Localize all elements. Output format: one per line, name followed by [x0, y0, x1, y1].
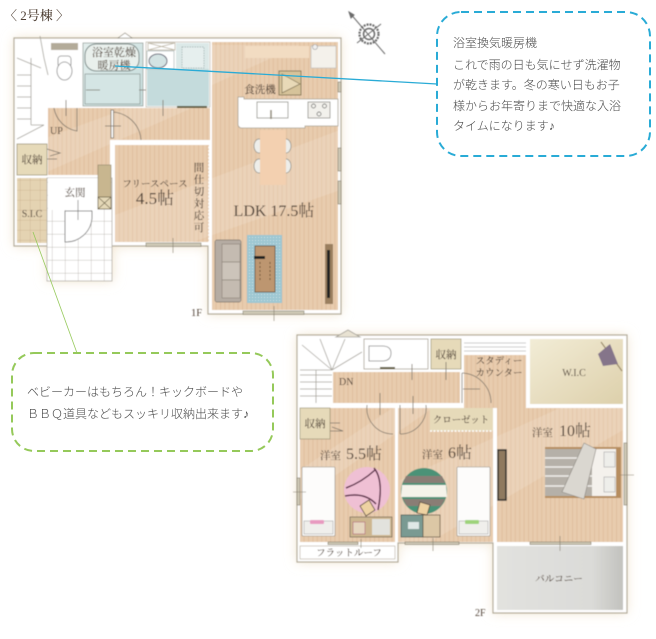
- furniture: green rug: [401, 468, 447, 514]
- label: study counter: カウンター: [475, 367, 523, 379]
- room: flat roof: フラットルーフ: [316, 548, 382, 559]
- room: balcony: バルコニー: [535, 575, 583, 585]
- room label: 10: 洋室: [532, 426, 553, 439]
- furniture: sofa: [215, 240, 241, 302]
- walls: 2F: [297, 335, 627, 613]
- partition note: 間: [194, 162, 204, 174]
- partition note: 可: [194, 221, 205, 234]
- room: toilet: [50, 42, 79, 107]
- room: flat roof: [300, 546, 395, 559]
- furniture: kitchen counter: [238, 97, 338, 128]
- partition note: 応: [194, 209, 206, 222]
- room: storage 1F: 収納: [22, 153, 43, 166]
- furniture: TV room 10: [498, 450, 506, 500]
- furniture: TV board: [325, 244, 333, 304]
- furniture: bed room 5.5: [302, 467, 335, 536]
- room label: 5.5: 洋室: [320, 449, 341, 462]
- walls: 1F: [14, 38, 341, 314]
- floor plan: 2F: [293, 330, 634, 619]
- room label: 6: 6帖: [448, 444, 472, 462]
- label: bathroom dryer: [92, 45, 136, 72]
- furniture: kitchen back counter: [245, 44, 336, 68]
- room: storage 2F upper: [431, 339, 461, 369]
- callout: storage: ベビーカーはもちろん！キックボードや: [27, 385, 243, 399]
- furniture: blue rug and low table: [247, 235, 282, 303]
- title: 〈 2号棟 〉: [4, 8, 69, 23]
- callout: storage: ＢＢＱ道具などもスッキリ収納出来ます♪: [27, 407, 249, 421]
- room: storage 2F lower: 収納: [304, 417, 326, 430]
- label: study counter: スタディー: [476, 355, 522, 367]
- label: study counter: [475, 355, 523, 379]
- room label: 5.5: [320, 445, 382, 463]
- label: 2F: 2F: [475, 608, 486, 619]
- label: 1F: 1F: [191, 308, 202, 319]
- room: W.I.C: W.I.C: [562, 368, 586, 379]
- room: 1F wood floors: [40, 42, 340, 310]
- partition note: 切: [194, 185, 205, 198]
- doors 2F: [330, 362, 491, 434]
- callout: bathroom heater: これで雨の日も気にせず洗濯物: [453, 58, 621, 72]
- label: dishwasher: 食洗機: [244, 83, 276, 96]
- room: stairs 1F: [17, 36, 48, 139]
- floor plan: 1F: [14, 33, 341, 321]
- room: S.I.C: S.I.C: [22, 209, 43, 220]
- callout: bathroom heater: 様からお年寄りまで快適な入浴: [453, 99, 621, 113]
- room: balcony: [497, 546, 623, 610]
- furniture: pink rug: [344, 467, 390, 513]
- partition note: 対: [194, 197, 205, 210]
- room: stairs upper landing: [464, 339, 526, 355]
- partition note: [194, 143, 209, 242]
- doors 1F: [47, 100, 163, 159]
- room label: LDK: LDK 17.5帖: [234, 202, 314, 220]
- room: bathroom: [83, 43, 146, 106]
- room label: free space: [122, 180, 188, 208]
- callout: storage: [12, 353, 273, 451]
- room: storage 2F upper: 収納: [436, 348, 457, 361]
- icon: dishwasher: [279, 71, 301, 95]
- furniture: desk 6: [401, 502, 440, 537]
- windows 2F: [293, 443, 634, 551]
- room: 2F wood floors: [300, 355, 623, 542]
- room label: free space: フリースペース: [122, 180, 188, 190]
- leader line: green: [33, 232, 77, 353]
- callout: bathroom heater: 浴室換気暖房機: [453, 36, 537, 50]
- label: bathroom dryer: 浴室乾燥: [92, 45, 136, 59]
- room: closet: クローゼット: [433, 415, 489, 426]
- icon: compass: [349, 12, 385, 54]
- furniture: double bed: [545, 443, 621, 499]
- room: W.I.C: [530, 339, 623, 404]
- furniture: dining table and chairs: [254, 130, 291, 185]
- icon: hanging clothes: [598, 342, 622, 371]
- windows 1F: [118, 33, 341, 321]
- room label: 10: 10帖: [559, 422, 591, 440]
- room: storage 1F: [17, 144, 47, 175]
- callout: bathroom heater: [437, 12, 650, 156]
- label: bathroom dryer: 暖房機: [98, 58, 131, 72]
- room label: 10: [532, 422, 591, 440]
- room: storage 2F lower: [300, 408, 330, 439]
- room: closet: [430, 408, 493, 431]
- room label: 6: 洋室: [422, 448, 443, 461]
- room: washroom: [146, 42, 210, 108]
- room: entrance: 玄関: [64, 186, 86, 199]
- room: stairs 2F: [300, 330, 363, 405]
- room label: 6: [422, 444, 472, 462]
- room label: free space: 4.5帖: [136, 189, 174, 208]
- label: DN: DN: [339, 377, 353, 388]
- partition note: 仕: [194, 173, 205, 186]
- label: UP: UP: [50, 126, 63, 137]
- leader line: blue: [115, 66, 437, 84]
- room: toilet 2F: [364, 339, 428, 369]
- room: S.I.C: [17, 178, 47, 243]
- furniture: desk 5.5: [350, 500, 392, 537]
- room: entrance: [47, 165, 112, 281]
- room label: 5.5: 5.5帖: [346, 445, 382, 463]
- callout: bathroom heater: タイムになります♪: [453, 119, 555, 133]
- callout: bathroom heater: が乾きます。冬の寒い日もお子: [453, 78, 620, 92]
- furniture: bed room 6: [457, 467, 490, 536]
